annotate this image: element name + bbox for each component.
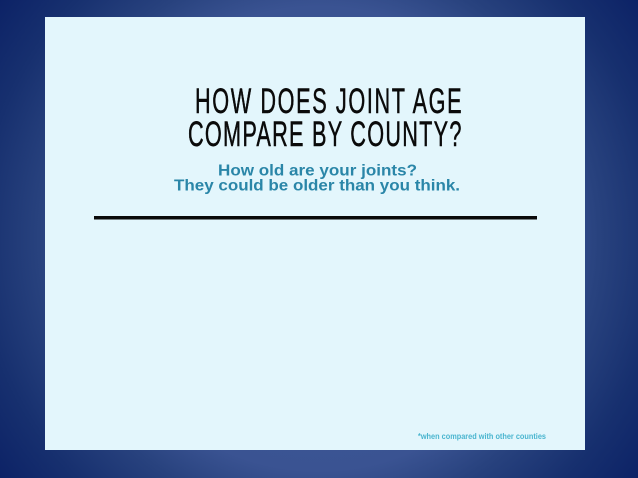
footnote: *when compared with other counties bbox=[418, 431, 546, 441]
title: COMPARE BY COUNTY? bbox=[188, 116, 461, 154]
title: HOW DOES JOINT AGE bbox=[195, 83, 462, 121]
subtitle: How old are your joints? bbox=[218, 162, 417, 180]
panel bbox=[45, 17, 585, 450]
divider line bbox=[94, 216, 537, 220]
subtitle bbox=[174, 162, 460, 194]
title bbox=[188, 83, 462, 154]
subtitle: They could be older than you think. bbox=[174, 178, 460, 194]
